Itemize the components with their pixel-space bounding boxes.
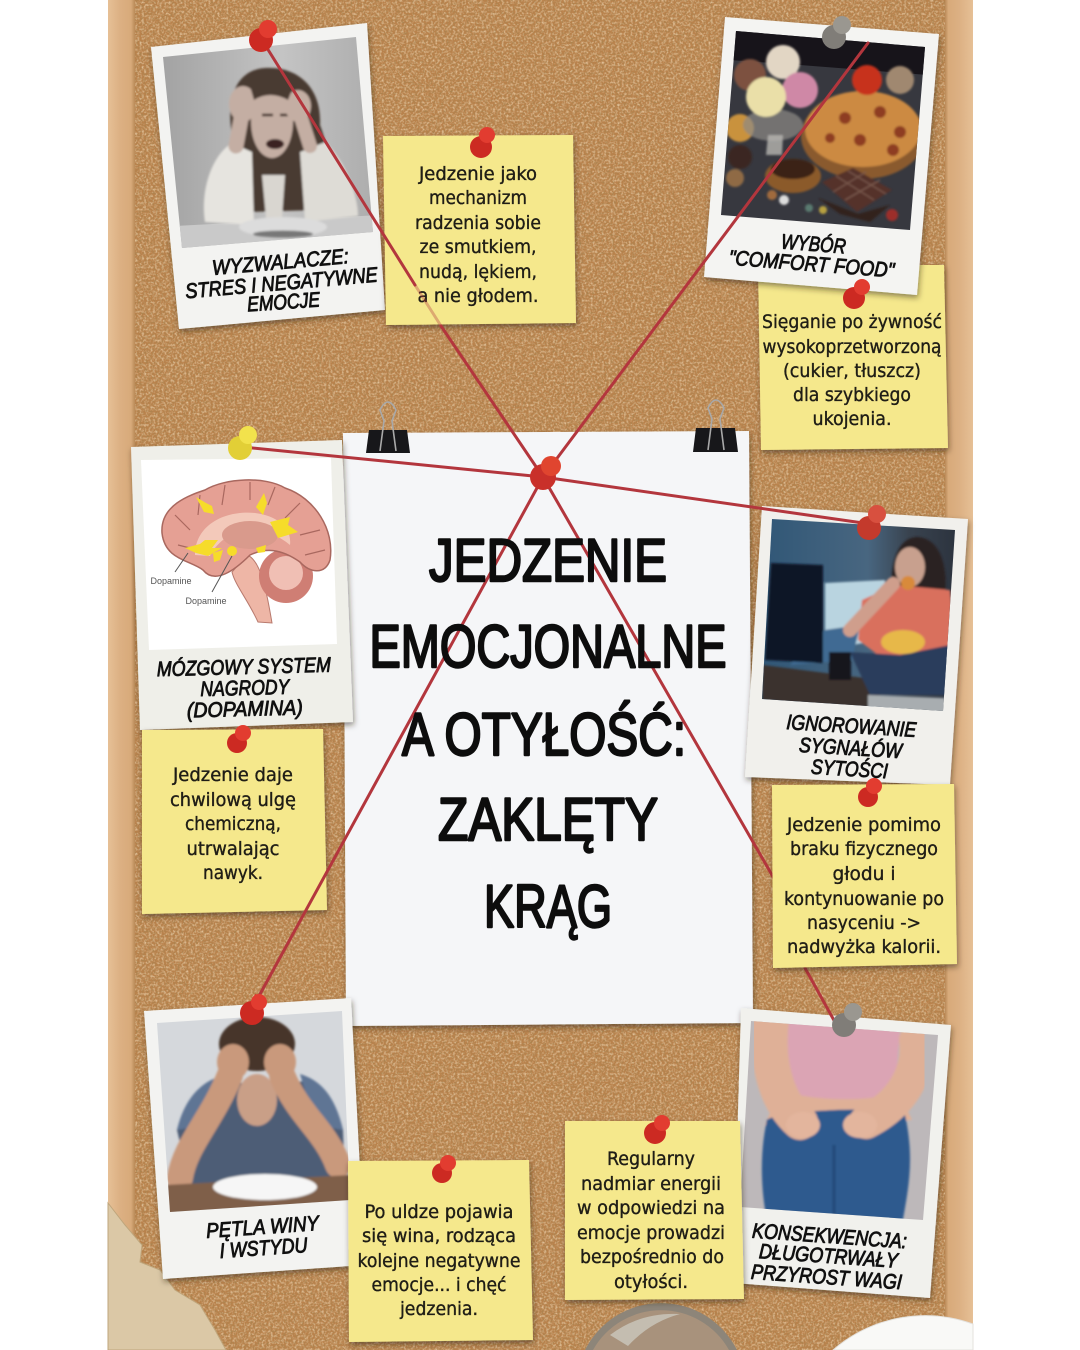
note: comfort food <box>758 265 948 450</box>
note: guilt <box>348 1160 533 1342</box>
note: guilt: jedzenia. <box>399 1298 478 1320</box>
photo image: woman eating in front of TV <box>762 519 955 711</box>
pin: TV photo <box>857 505 886 540</box>
note: energy surplus: emocje prowadzi <box>577 1222 725 1244</box>
photo image: stressed woman <box>163 37 373 248</box>
photo: stress and negative emotions <box>150 23 390 329</box>
photo caption: STRES I NEGATYWNE <box>184 264 379 303</box>
note: comfort food: (cukier, tłuszcz) <box>783 360 921 382</box>
photo caption: DŁUGOTRWAŁY <box>758 1240 900 1273</box>
note: comfort food: Sięganie po żywność <box>762 311 942 333</box>
note: guilt: kolejne negatywne <box>358 1250 520 1272</box>
title: EMOCJONALNE <box>370 613 726 680</box>
title: JEDZENIE <box>429 527 667 594</box>
note: ignoring hunger cues: Jedzenie pomimo <box>786 814 941 836</box>
photo: long-term weight gain <box>733 1008 951 1298</box>
photo caption <box>157 654 332 723</box>
photo image: pizza, ice cream and chocolate <box>721 31 925 230</box>
note: dopamine: chemiczną, <box>185 813 281 835</box>
note: ignoring hunger cues: kontynuowanie po <box>784 888 944 910</box>
pin: top right grey <box>822 16 851 49</box>
photo caption: WYZWALACZE: <box>211 245 350 280</box>
photo image: brain diagram <box>141 458 337 650</box>
note: emotional coping: ze smutkiem, <box>420 236 536 258</box>
note: dopamine: nawyk. <box>203 862 263 884</box>
note: comfort food: dla szybkiego <box>793 384 911 406</box>
note: ignoring hunger cues: braku fizycznego <box>790 838 938 860</box>
pin: top left <box>249 20 277 52</box>
photo caption: PRZYROST WAGI <box>750 1261 903 1294</box>
photo image: brain diagram: Dopamine <box>185 596 227 606</box>
pin: man photo <box>240 994 267 1025</box>
photo caption: WYBÓR <box>780 231 847 259</box>
note: energy surplus <box>565 1121 744 1300</box>
photo: ignoring satiety signals <box>745 506 968 785</box>
note: emotional coping: Jedzenie jako <box>418 163 537 185</box>
title: ZAKLĘTY <box>438 786 658 853</box>
photo: brain reward system <box>130 440 353 730</box>
note: emotional coping: mechanizm <box>429 187 527 209</box>
note: emotional coping <box>383 135 576 325</box>
pin: note four <box>858 778 882 807</box>
photo caption: "COMFORT FOOD" <box>728 247 897 283</box>
pin: note three <box>227 725 251 753</box>
photo caption: PĘTLA WINY <box>205 1212 321 1243</box>
photo: guilt and shame loop <box>144 998 365 1279</box>
note: ignoring hunger cues: nadwyżka kalorii. <box>787 936 941 958</box>
note: dopamine: chwilową ulgę <box>170 789 296 811</box>
title: A OTYŁOŚĆ: <box>402 701 686 768</box>
note: emotional coping: nudą, lękiem, <box>419 261 537 283</box>
title <box>370 527 726 940</box>
photo image: man over empty plate <box>157 1011 348 1212</box>
pin: note two <box>843 279 870 309</box>
red string connections <box>243 40 870 1024</box>
photo caption: EMOCJE <box>246 288 322 317</box>
pin: centre knot <box>530 456 561 490</box>
photo caption <box>728 231 897 283</box>
title: KRĄG <box>484 873 612 940</box>
pin: bottom right grey <box>832 1003 862 1037</box>
photo image: woman fastening tight jeans <box>742 1021 938 1220</box>
note: comfort food: wysokoprzetworzoną <box>762 336 942 358</box>
note: energy surplus: w odpowiedzi na <box>577 1197 725 1219</box>
note: guilt: się wina, rodząca <box>362 1225 516 1247</box>
note: guilt: Po uldze pojawia <box>364 1201 514 1223</box>
photo caption <box>786 711 918 783</box>
photo caption <box>205 1212 321 1263</box>
note: ignoring hunger cues: głodu i <box>832 863 896 885</box>
torn old paper <box>108 1203 226 1350</box>
photo caption: KONSEKWENCJA: <box>751 1220 908 1253</box>
photo caption: NAGRODY <box>200 676 291 701</box>
note: ignoring hunger cues: nasyceniu -> <box>807 912 921 934</box>
dopamine highlights <box>185 493 298 562</box>
note: energy surplus: Regularny <box>607 1148 695 1170</box>
photo caption <box>750 1220 908 1294</box>
photo caption: I WSTYDU <box>219 1234 309 1263</box>
magnifying glass <box>585 1303 737 1350</box>
photo caption: IGNOROWANIE <box>786 711 918 742</box>
note: dopamine: Jedzenie daje <box>172 764 293 786</box>
photo caption: SYGNAŁÓW <box>798 734 904 763</box>
note: energy surplus: otyłości. <box>614 1271 688 1293</box>
photo caption: MÓZGOWY SYSTEM <box>157 654 332 681</box>
note: ignoring hunger cues <box>772 784 957 968</box>
note: emotional coping: a nie głodem. <box>418 285 538 307</box>
photo image: brain diagram: Dopamine <box>150 576 192 586</box>
note: guilt: emocje... i chęć <box>372 1274 506 1296</box>
note: energy surplus: nadmiar energii <box>581 1173 721 1195</box>
photo: comfort food <box>704 17 939 295</box>
photo caption <box>184 245 379 317</box>
central paper sheet <box>343 431 753 1026</box>
pin: note six <box>644 1115 670 1144</box>
pin: yellow <box>228 426 257 460</box>
white plate <box>833 1316 973 1350</box>
note: emotional coping: radzenia sobie <box>415 212 541 234</box>
photo caption: SYTOŚCI <box>810 755 889 783</box>
pin: note one <box>470 127 495 158</box>
note: energy surplus: bezpośrednio do <box>580 1246 724 1268</box>
photo caption: (DOPAMINA) <box>187 696 303 723</box>
note: dopamine <box>142 729 327 914</box>
note: comfort food: ukojenia. <box>812 408 892 430</box>
note: dopamine: utrwalając <box>186 838 280 860</box>
binder clip right <box>693 400 738 452</box>
binder clip left <box>366 402 410 453</box>
pin: note five <box>432 1155 456 1183</box>
